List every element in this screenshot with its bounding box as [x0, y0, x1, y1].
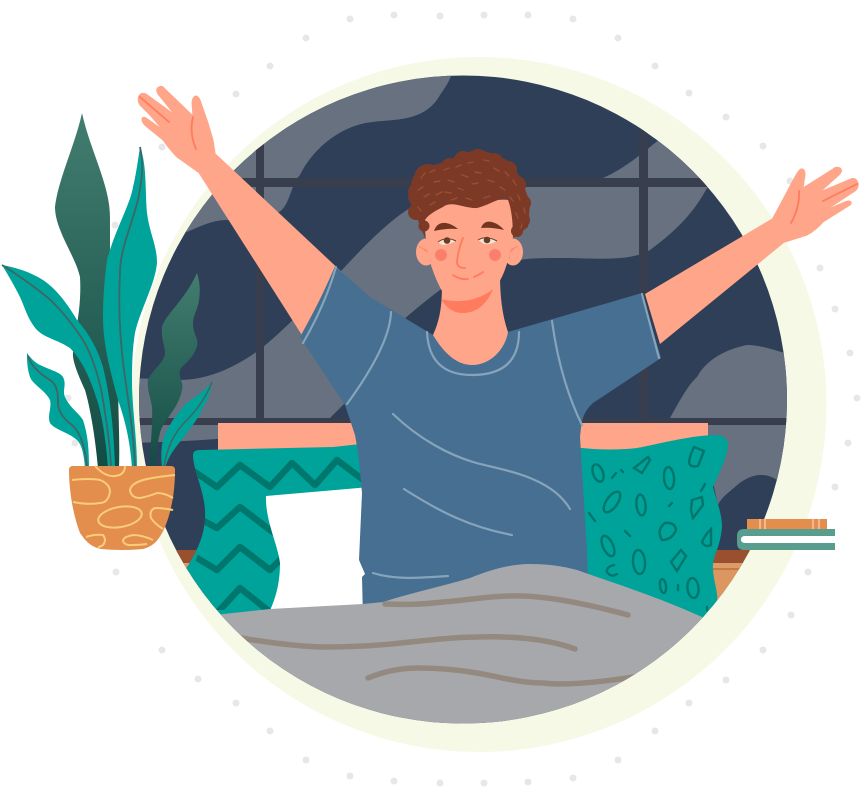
small wavy leaf — [27, 353, 89, 468]
cream ring — [132, 57, 826, 752]
right pillow — [575, 435, 728, 630]
blanket folds — [235, 596, 640, 684]
zigzag pattern — [192, 460, 366, 612]
orange book — [747, 519, 827, 529]
small right leaf — [161, 382, 212, 468]
stacked books — [737, 519, 835, 550]
wooden shelf — [176, 550, 750, 630]
lower-right cloud — [670, 345, 787, 504]
window frame — [130, 120, 800, 425]
ears — [416, 238, 523, 266]
dark tall leaf — [55, 113, 119, 468]
flower pot — [69, 466, 175, 550]
face — [424, 200, 513, 300]
headboard — [218, 423, 708, 450]
blanket — [220, 564, 702, 724]
eyebrows — [434, 222, 504, 231]
right arm and hand — [645, 167, 858, 344]
nose and smile — [453, 238, 483, 279]
green book — [737, 529, 835, 550]
cheeks — [435, 249, 501, 261]
window scene in circle — [130, 70, 800, 730]
left pillow — [180, 443, 370, 630]
neck shadow — [441, 289, 493, 313]
teal left leaf — [2, 265, 115, 468]
person — [138, 86, 858, 620]
neck — [433, 275, 508, 365]
potted plant — [2, 113, 212, 550]
dark wavy leaf — [148, 273, 200, 468]
eyes — [438, 237, 497, 245]
t-shirt — [300, 266, 661, 620]
teal center leaf — [103, 147, 157, 468]
diagonal cloud band — [130, 135, 730, 443]
curly hair — [408, 149, 531, 238]
shirt seams and folds — [303, 267, 659, 578]
pot pattern — [72, 466, 175, 547]
left arm and hand — [138, 86, 345, 340]
night sky background — [130, 70, 800, 730]
upper-left cloud — [186, 76, 451, 232]
white pillow — [266, 487, 370, 615]
spot pattern — [589, 447, 711, 610]
